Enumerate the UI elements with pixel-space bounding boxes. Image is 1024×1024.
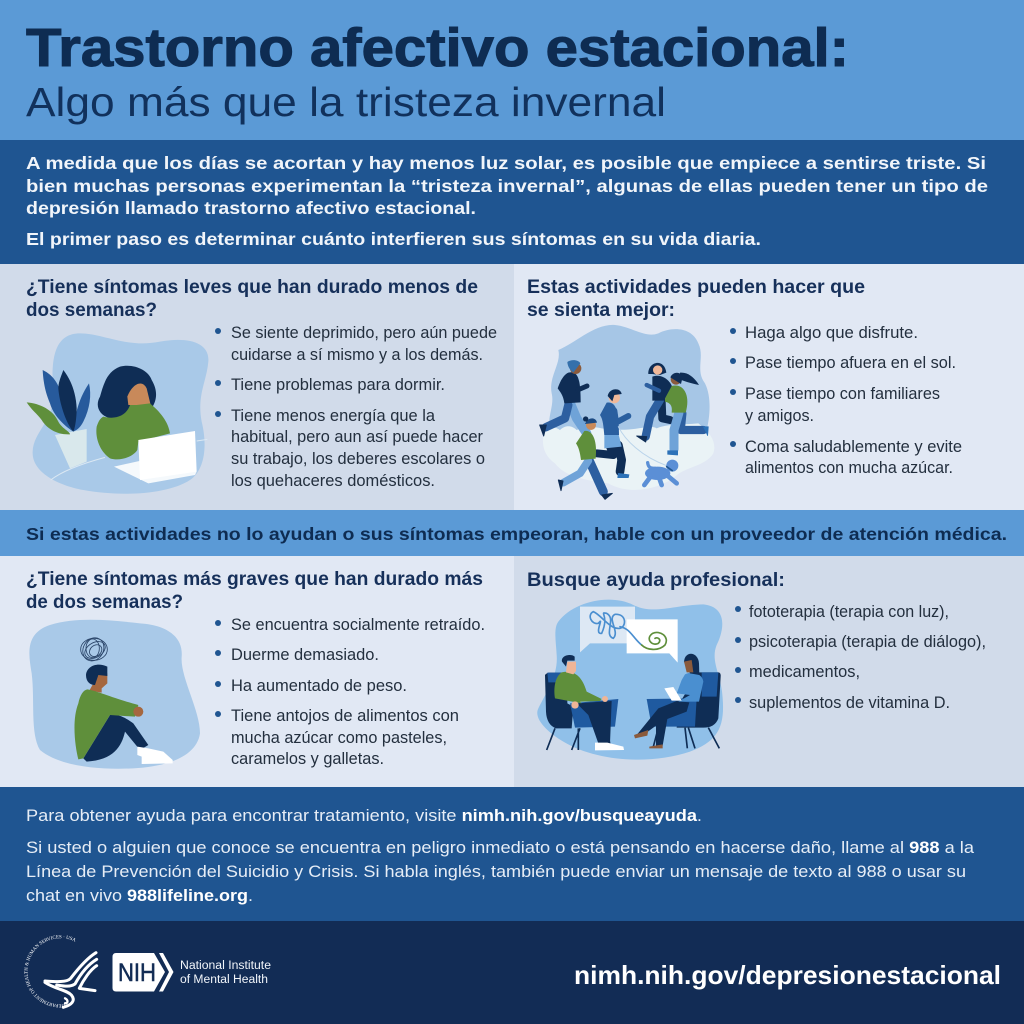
heading: mild symptoms [26, 276, 478, 321]
activities list: Pase tiempo afuera en el sol. [745, 354, 956, 372]
heading: activities: se sienta mejor: [527, 299, 675, 321]
logo: HHS seal: DEPARTMENT OF HEALTH & HUMAN SERVICES · USA [24, 935, 76, 1008]
illustration: family running with dog [540, 325, 714, 499]
footer panel: help resources [0, 787, 1024, 921]
callout band: talk to a provider: Si estas actividades no lo ayudan o sus síntomas empeoran, hable con un proveedor de atención médica. [26, 524, 1007, 544]
heading: mild symptoms: ¿Tiene síntomas leves que han durado menos de [26, 276, 478, 298]
panel: activities [514, 264, 1024, 510]
logo: NIH badge: NIH [118, 959, 156, 987]
symptom list: severe [215, 616, 485, 768]
activities list: alimentos con mucha azúcar. [745, 459, 953, 477]
subtitle: Algo más que la tristeza invernal [26, 79, 666, 125]
intro panel [0, 140, 1024, 264]
NIMH name: of Mental Health [180, 974, 268, 986]
symptom list: severe: Se encuentra socialmente retraído. [231, 616, 485, 634]
heading: severe symptoms [26, 568, 483, 613]
heading: activities: Estas actividades pueden hacer que [527, 276, 865, 298]
symptom list: mild: habitual, pero aun así puede hacer [231, 428, 484, 446]
logo: NIH badge [112, 953, 174, 992]
symptom list: severe: Ha aumentado de peso. [231, 677, 407, 695]
footer panel: help resources: Para obtener ayuda para encontrar tratamiento, visite nimh.nih.gov/busqueayuda . [26, 807, 702, 825]
heading: severe symptoms: de dos semanas? [26, 591, 183, 613]
website URL: nimh.nih.gov/depresionestacional [574, 960, 1001, 990]
activities list [730, 324, 962, 477]
NIMH name: National Institute [180, 960, 271, 972]
activities list: Pase tiempo con familiares [745, 385, 940, 403]
treatment list: medicamentos, [749, 663, 860, 681]
intro panel: El primer paso es determinar cuánto interfieren sus síntomas en su vida diaria. [26, 229, 761, 249]
panel: professional help [514, 556, 1024, 787]
symptom list: mild: Se siente deprimido, pero aún puede [231, 324, 497, 342]
treatment list: fototerapia (terapia con luz), [749, 603, 949, 621]
callout band: talk to a provider [0, 510, 1024, 556]
symptom list: severe: caramelos y galletas. [231, 750, 384, 768]
intro panel: A medida que los días se acortan y hay menos luz solar, es posible que empiece a sentirse triste. Si [26, 153, 986, 173]
illustration: therapy session [537, 600, 723, 760]
NIMH name [180, 960, 271, 986]
treatment list: psicoterapia (terapia de diálogo), [749, 633, 986, 651]
symptom list: mild: Tiene menos energía que la [231, 407, 435, 425]
footer panel: help resources: Línea de Prevención del Suicidio y Crisis. Si habla inglés, también puede enviar un mensaje de texto al 988 o usar su [26, 863, 966, 881]
panel: severe symptoms [0, 556, 514, 787]
heading: severe symptoms: ¿Tiene síntomas más graves que han durado más [26, 568, 483, 590]
activities list: Haga algo que disfrute. [745, 324, 918, 342]
footer panel: help resources: Si usted o alguien que conoce se encuentra en peligro inmediato o está pensando en hacerse daño, llame al 988 a la [26, 839, 974, 857]
panel: mild symptoms [0, 264, 514, 510]
symptom list: mild: cuidarse a sí mismo y a los demás. [231, 346, 483, 364]
symptom list: severe: Duerme demasiado. [231, 646, 379, 664]
treatment list: suplementos de vitamina D. [749, 694, 950, 712]
symptom list: mild [215, 324, 497, 490]
intro panel: depresión llamado trastorno afectivo estacional. [26, 198, 476, 218]
activities list: y amigos. [745, 407, 814, 425]
symptom list: severe: mucha azúcar como pasteles, [231, 729, 447, 747]
bottom bar [0, 921, 1024, 1024]
heading: mild symptoms: dos semanas? [26, 299, 157, 321]
heading: professional help: Busque ayuda profesional: [527, 569, 785, 591]
footer panel: help resources: chat en vivo 988lifeline.org . [26, 887, 253, 905]
title: Trastorno afectivo estacional: [26, 18, 849, 78]
logo: HHS seal [24, 935, 98, 1009]
illustration: withdrawn person sitting [29, 620, 200, 769]
symptom list: mild: Tiene problemas para dormir. [231, 376, 445, 394]
symptom list: severe: Tiene antojos de alimentos con [231, 707, 459, 725]
symptom list: mild: los quehaceres domésticos. [231, 472, 435, 490]
symptom list: mild: su trabajo, los deberes escolares o [231, 450, 485, 468]
heading: activities [527, 276, 865, 321]
activities list: Coma saludablemente y evite [745, 438, 962, 456]
illustration: woman with face in hands at laptop [27, 333, 208, 494]
header panel [0, 0, 1024, 140]
intro panel: bien muchas personas experimentan la “tristeza invernal”, algunas de ellas pueden tener un tipo de [26, 176, 988, 196]
treatment list [735, 603, 986, 712]
